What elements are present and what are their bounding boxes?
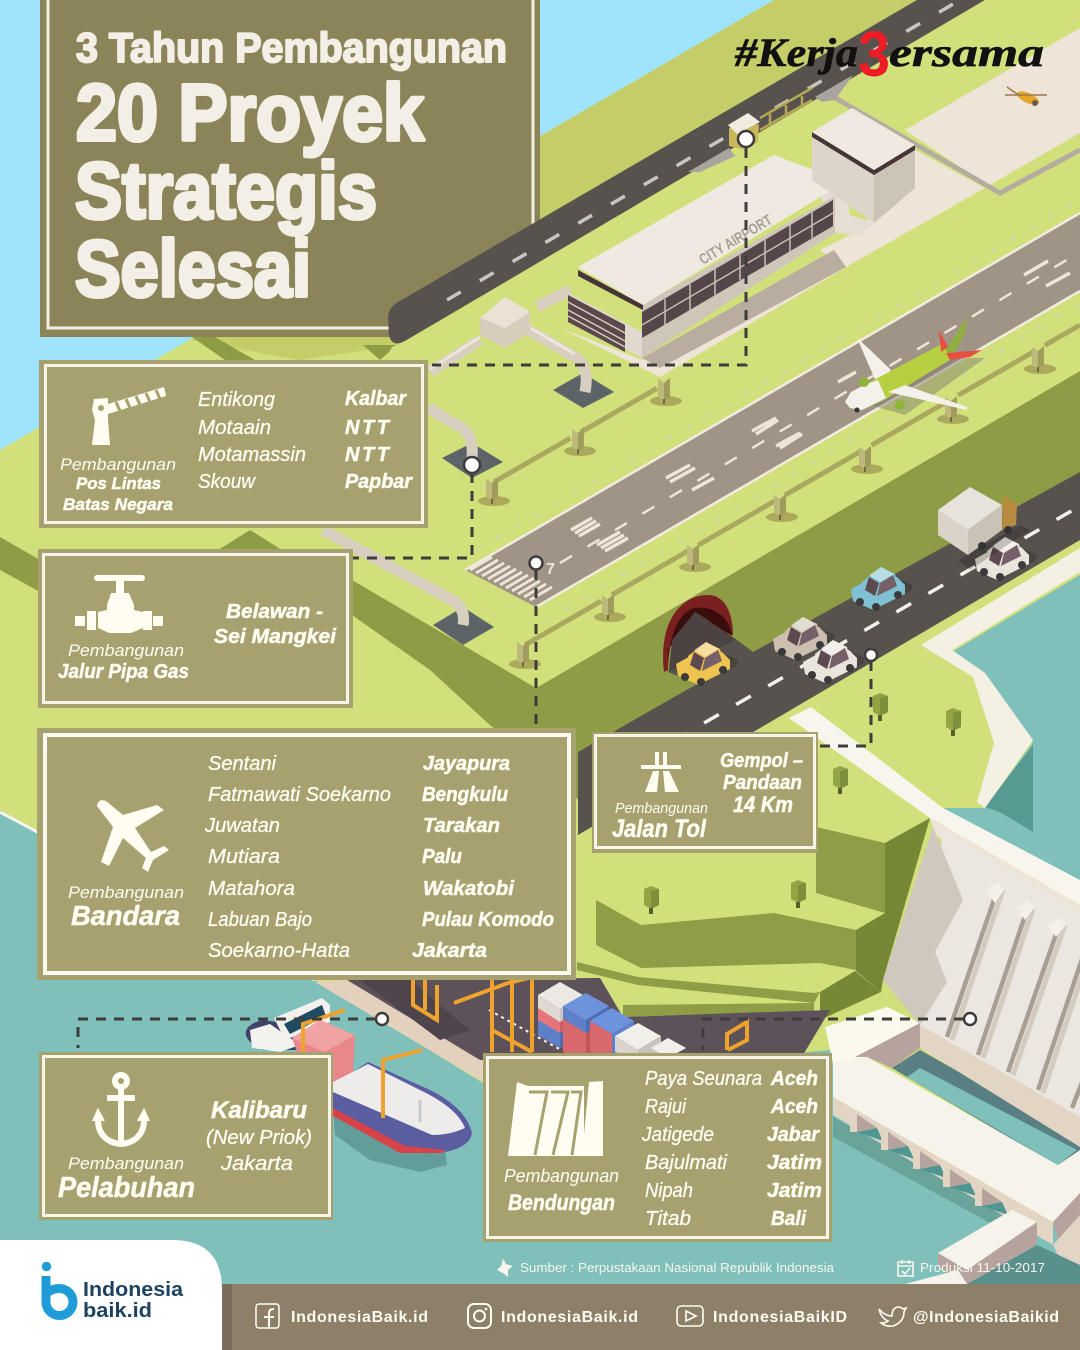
white car near truck [975, 537, 1037, 581]
port cranes [413, 975, 747, 1052]
dam bridge blocks [825, 1007, 1080, 1168]
location: kalibaru: (New Priok) [206, 1127, 312, 1149]
label: pelabuhan: Pembangunan [68, 1154, 184, 1173]
label: bandara: Pembangunan [68, 883, 184, 902]
road gate and bridge [688, 75, 853, 172]
olive terrain walls left [0, 337, 397, 592]
label: jalan tol: Pembangunan [615, 800, 708, 817]
list: airports: Mutiara [208, 846, 280, 868]
label: bandara: Bandara [71, 900, 180, 931]
panel: bendungan [483, 1053, 832, 1242]
logo wordmark: baik.id [83, 1300, 152, 1322]
list: airports: Fatmawati Soekarno [208, 784, 391, 806]
list: airport regions: Pulau Komodo [422, 909, 554, 931]
icon: border gate [92, 387, 166, 445]
white sedan [803, 640, 865, 684]
list: dam regions: Jatim [767, 1180, 822, 1202]
facebook [256, 1304, 428, 1328]
list: airports: Juwatan [204, 815, 280, 837]
label: pos lintas: Pembangunan [60, 455, 176, 474]
title line 3: Selesai [75, 224, 311, 313]
hashtag [734, 18, 1044, 90]
icon: anchor [93, 1075, 149, 1144]
list: dam regions: Bali [771, 1208, 806, 1230]
list: border posts: NTT [345, 444, 391, 466]
airplane [845, 317, 985, 415]
label: bandara [68, 883, 184, 931]
list: airports: Soekarno-Hatta [208, 940, 350, 962]
icon: plane [97, 800, 169, 872]
highway [578, 472, 1080, 835]
police car [851, 567, 913, 611]
port quay [315, 978, 830, 1085]
shore line [0, 812, 315, 980]
yellow taxi [676, 642, 738, 686]
list: border posts: Motamassin [198, 444, 306, 466]
upper lake with retaining wall [921, 548, 1080, 890]
instagram [468, 1304, 638, 1328]
label: bendungan: Pembangunan [504, 1166, 619, 1186]
trees [644, 693, 961, 914]
facebook: IndonesiaBaik.id [291, 1309, 428, 1326]
pipeline 3 [323, 530, 494, 645]
logo panel [0, 1240, 222, 1350]
label: pelabuhan: Pelabuhan [58, 1172, 195, 1204]
list: dam regions: Jabar [767, 1124, 820, 1146]
list: border posts: Kalbar [345, 388, 407, 410]
airport fences [478, 325, 1080, 669]
helipad apron [820, 28, 1080, 267]
location: kalibaru [206, 1097, 312, 1175]
icon: gas valve [75, 575, 163, 633]
route: belawan: Sei Mangkei [214, 626, 336, 648]
truck [938, 487, 1030, 570]
dam face [883, 827, 1080, 1147]
route: gempol: 14 Km [733, 792, 793, 817]
route: gempol: Gempol – [720, 750, 803, 772]
airport platform wall [352, 371, 1080, 800]
route: gempol [720, 750, 803, 817]
icon: dam [508, 1081, 603, 1156]
connector dashed lines [78, 148, 964, 1050]
label: bendungan: Bendungan [508, 1190, 615, 1215]
logo mark [42, 1262, 73, 1316]
list: airport regions: Wakatobi [423, 878, 514, 900]
title panel [40, 0, 540, 337]
footer bar [222, 1284, 1080, 1350]
list: airport regions: Palu [422, 846, 462, 868]
instagram: IndonesiaBaik.id [501, 1309, 638, 1326]
upper grass band [190, 0, 1000, 360]
runway [465, 200, 1080, 620]
list: dam regions [767, 1068, 822, 1230]
list: airports [204, 753, 391, 962]
video channel [677, 1306, 847, 1326]
pipeline 1 [430, 290, 614, 408]
list: dams [641, 1068, 762, 1230]
container stacks [538, 982, 686, 1060]
terminal paving and shadow [560, 250, 850, 377]
list: airports: Matahora [208, 878, 295, 900]
list: dam regions: Aceh [770, 1068, 818, 1090]
connector end markers [376, 131, 976, 1025]
logo wordmark: Indonesia [83, 1279, 184, 1301]
source note: Sumber : Perpustakaan Nasional Republik Indonesia [520, 1260, 835, 1275]
lower dam block [905, 1210, 1080, 1284]
panel: pelabuhan [39, 1052, 333, 1220]
list: dams: Rajui [645, 1096, 686, 1118]
list: airport regions: Bengkulu [422, 784, 508, 806]
list: border posts: Skouw [198, 471, 256, 493]
sky [0, 0, 774, 450]
helicopter [1005, 87, 1047, 108]
list: dam regions: Jatim [767, 1152, 822, 1174]
airport platform top [300, 0, 1080, 688]
hashtag: #Kerja [734, 30, 858, 75]
white service road [789, 707, 1080, 925]
label: jalan tol [612, 800, 708, 843]
list: dams: Bajulmati [645, 1152, 728, 1174]
list: airport regions: Jayapura [423, 753, 510, 775]
hashtag: ersama [889, 30, 1044, 75]
location: kalibaru: Kalibaru [211, 1097, 307, 1124]
label: pipa gas: Pembangunan [68, 641, 184, 660]
title subheading: 3 Tahun Pembangunan [76, 24, 507, 71]
list: dams: Paya Seunara [645, 1068, 762, 1090]
route: belawan [214, 601, 336, 648]
lower sea [0, 810, 1080, 1350]
panel: pos lintas batas negara [39, 360, 428, 528]
list: airports: Labuan Bajo [208, 909, 312, 931]
video channel: IndonesiaBaikID [713, 1309, 847, 1326]
icon: toll road [641, 752, 681, 792]
cargo ship [246, 998, 472, 1172]
label: pelabuhan [58, 1154, 195, 1204]
hashtag: 3 [858, 18, 890, 90]
panel: jalur pipa gas [38, 549, 353, 708]
location: kalibaru: Jakarta [220, 1153, 293, 1175]
panel: bandara [37, 728, 576, 980]
list: border posts [198, 388, 413, 493]
list: dam regions: Aceh [770, 1096, 818, 1118]
tunnel [663, 595, 737, 672]
list: airports: Sentani [208, 753, 277, 775]
route: belawan: Belawan - [226, 601, 323, 623]
label: pos lintas: Pos Lintas [76, 474, 161, 493]
airport access road [388, 0, 985, 343]
pipeline 2 [428, 408, 503, 478]
label: pos lintas [60, 455, 176, 514]
list: airport regions: Jakarta [412, 940, 487, 962]
airport terminal building [568, 155, 874, 358]
route: gempol: Pandaan [723, 772, 802, 794]
list: border posts: Motaain [198, 417, 271, 439]
label: jalan tol: Jalan Tol [612, 815, 707, 843]
list: border posts: NTT [345, 417, 391, 439]
list: airport regions [412, 753, 554, 962]
label: bendungan [504, 1166, 619, 1215]
twitter: @IndonesiaBaikid [913, 1309, 1059, 1326]
title line 2: Strategis [75, 146, 377, 235]
list: border posts: Papbar [345, 471, 413, 493]
title line 1: 20 Proyek [76, 68, 424, 157]
terraced hillside [577, 818, 930, 1020]
label: pipa gas: Jalur Pipa Gas [58, 661, 189, 683]
beige sedan [773, 617, 835, 661]
airport tower block [812, 108, 915, 223]
list: dams: Nipah [645, 1180, 693, 1202]
list: dams: Jatigede [641, 1124, 714, 1146]
terminal sign: CITY AIRPORT [696, 212, 775, 268]
logo wordmark [83, 1279, 184, 1322]
list: dams: Titab [645, 1208, 691, 1230]
production date: Produksi 11-10-2017 [920, 1260, 1045, 1275]
list: border posts: Entikong [198, 389, 275, 411]
panel: jalan tol [592, 732, 818, 853]
label: pos lintas: Batas Negara [63, 495, 173, 514]
list: airport regions: Tarakan [423, 815, 500, 837]
label: pipa gas [58, 641, 189, 683]
runway number: 7 [546, 561, 555, 578]
spillway [833, 1057, 1080, 1284]
